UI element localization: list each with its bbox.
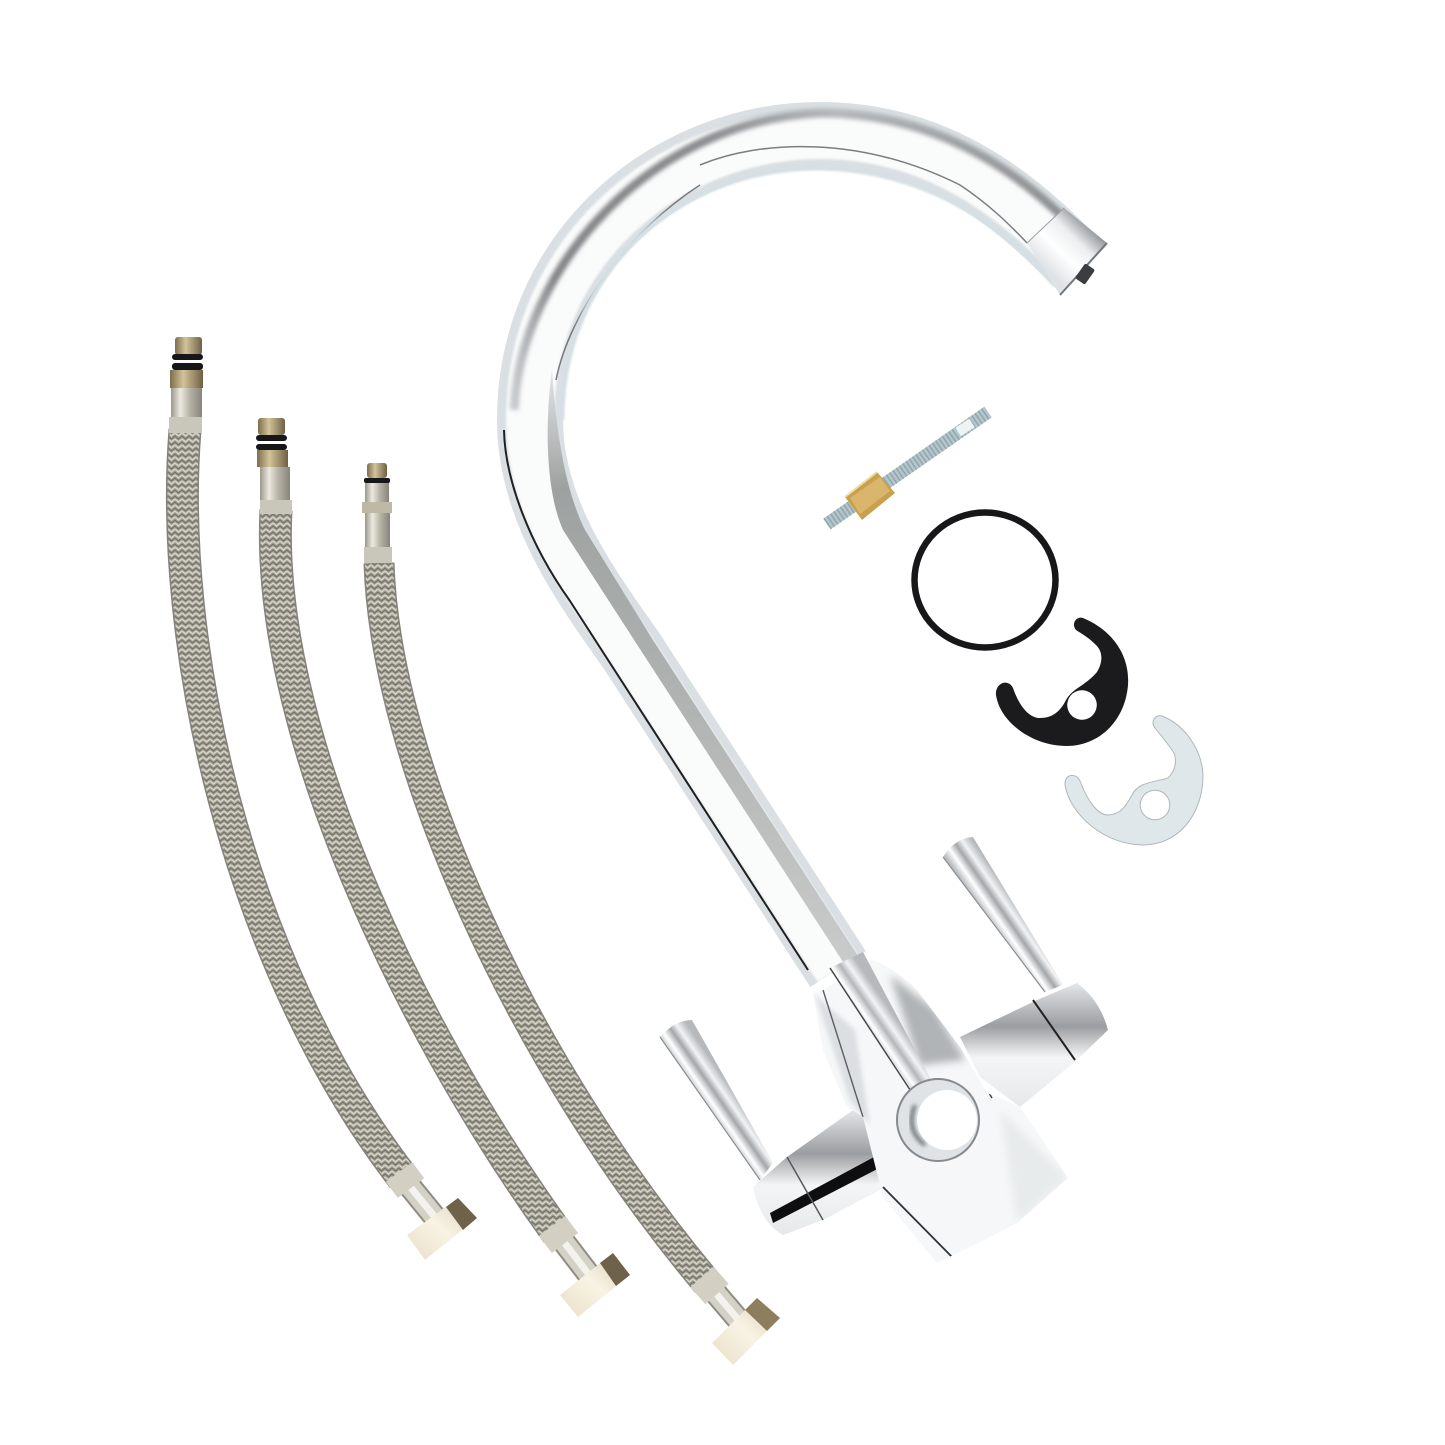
spout tip (1027, 208, 1107, 295)
centre ring (897, 1079, 979, 1161)
gray reflection band, inner side of neck (548, 370, 858, 965)
brass hex nut (845, 472, 895, 520)
left cylinder and handle hub (660, 1020, 895, 1235)
flexible hose 2 (256, 418, 630, 1317)
hose 2 top fitting (256, 418, 292, 514)
hose 3 top fitting (362, 463, 392, 563)
hose 1 top fitting (169, 337, 203, 433)
spout tube (504, 113, 1107, 970)
centre lever (830, 952, 938, 1105)
inner contour lines of arch (556, 147, 1027, 380)
threaded stud with brass nut (827, 412, 988, 524)
left lever (660, 1020, 773, 1180)
flexible hose 3 (362, 463, 780, 1365)
black contour line, lower neck (504, 430, 808, 970)
flexible hose 1 (169, 337, 477, 1260)
black rubber washer (996, 618, 1128, 746)
hose 2 bottom fitting (552, 1226, 630, 1317)
hose 3 bottom fitting (702, 1277, 780, 1365)
zinc metal washer (1065, 716, 1203, 845)
hose 1 bottom fitting (399, 1172, 477, 1260)
pale inner rim (562, 168, 1055, 420)
tap body (813, 952, 1068, 1263)
black o-ring (914, 512, 1056, 648)
reflection band along the arch (514, 113, 1068, 410)
product photo: mixer tap kit (166, 102, 1204, 1365)
right cylinder and handle hub (943, 837, 1108, 1107)
right lever (943, 837, 1063, 992)
